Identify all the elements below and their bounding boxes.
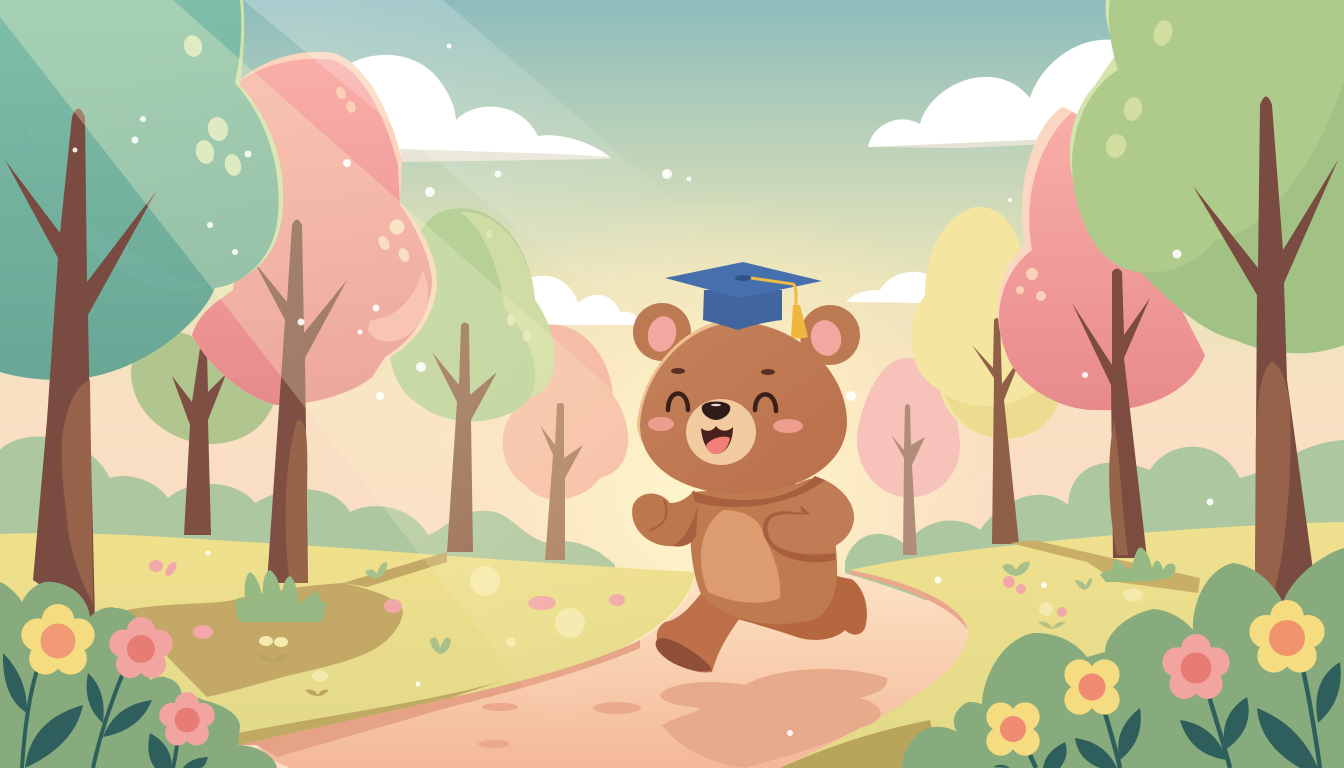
- bear front leg: [657, 592, 746, 673]
- tree: large green right: [1070, 0, 1344, 605]
- bear body: [690, 482, 837, 624]
- tree: small olive back left: [131, 332, 275, 535]
- stems and leaves left: [3, 653, 208, 768]
- distant bushes left: [0, 437, 615, 600]
- flower: pink left: [109, 617, 173, 678]
- bear head: [640, 322, 847, 494]
- flower: small pink left: [159, 692, 215, 745]
- bear: [632, 262, 867, 673]
- stems and leaves right: [993, 662, 1341, 768]
- foliage right foreground: [902, 548, 1344, 768]
- bear brows: [671, 368, 685, 374]
- bear head rim light: [637, 319, 737, 480]
- bear left arm: [632, 490, 695, 546]
- grad cap base: [703, 290, 782, 330]
- tree: green centre-left: [389, 208, 555, 552]
- dirt track left: [343, 552, 447, 587]
- bear back leg: [733, 575, 867, 640]
- cloud: mid right: [846, 272, 935, 303]
- soft light bokeh: [470, 566, 585, 638]
- bear nose: [702, 402, 730, 420]
- cloud: upper right: [868, 40, 1125, 148]
- grad cap top: [665, 262, 822, 298]
- bear cheeks: [648, 417, 674, 431]
- cloud: mid left: [530, 276, 640, 325]
- tree: faint peach centre-left: [503, 325, 628, 560]
- bear collar: [692, 476, 825, 507]
- bear right arm: [762, 478, 854, 553]
- bear shoe sole: [656, 638, 712, 671]
- ground corner bottom right of path: [780, 720, 940, 768]
- light ray through sky: [243, 0, 745, 330]
- tree: large teal left: [0, 0, 283, 622]
- bear muzzle: [686, 399, 756, 465]
- flower: yellow right centre: [1064, 659, 1120, 715]
- flower: yellow right low: [986, 702, 1040, 756]
- puddles on trail: [478, 702, 786, 748]
- bear mouth: [701, 426, 733, 454]
- cloud: upper left: [340, 55, 611, 162]
- light ray over left trees: [0, 0, 700, 768]
- small meadow flowers: [149, 560, 1143, 696]
- bear eyes: [668, 394, 688, 410]
- cap tassel: [791, 305, 808, 338]
- tree: yellow centre-right: [911, 207, 1059, 544]
- path: winding trail: [258, 572, 968, 768]
- tree: large pink left-centre: [192, 52, 437, 583]
- bear left ear: [633, 303, 691, 361]
- hill: right meadow: [780, 522, 1344, 768]
- bear belly: [701, 510, 780, 603]
- path edge shade: [238, 640, 640, 757]
- grass tuft right: [1100, 547, 1176, 582]
- distant bushes right: [845, 440, 1344, 600]
- tree: pink right: [998, 107, 1205, 558]
- dirt track right: [1010, 540, 1200, 593]
- bear arm shadow line: [763, 505, 835, 562]
- bear shadow: [660, 669, 887, 768]
- grass tuft left: [236, 570, 327, 622]
- flower: pink right: [1162, 634, 1230, 699]
- cap button and cord: [735, 275, 751, 281]
- flower: yellow left: [21, 604, 95, 675]
- foliage left foreground: [0, 582, 277, 768]
- floating light specks: [72, 44, 1214, 736]
- dark ground shadow under tree: [127, 583, 403, 697]
- hill: left meadow: [0, 533, 695, 768]
- bear right ear: [800, 305, 860, 365]
- tree: pale pink centre-right: [857, 358, 960, 555]
- flower: yellow right top: [1249, 600, 1325, 673]
